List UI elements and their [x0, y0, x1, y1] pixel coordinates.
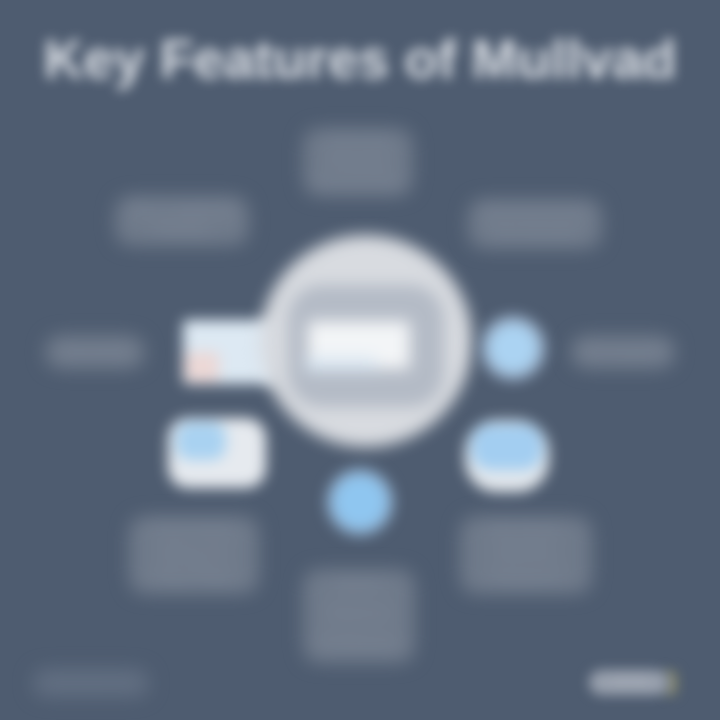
text block: bottom feature [303, 569, 415, 663]
logo wordmark: VPN [610, 672, 648, 692]
text block: middle left feature [45, 335, 145, 369]
text block: upper right feature [468, 199, 602, 249]
text block: top feature: Strong [329, 129, 387, 149]
text block: upper left feature [115, 196, 249, 246]
text block: upper left feature: No Logging [129, 197, 235, 218]
outer ring [260, 235, 472, 447]
card blue area [176, 422, 226, 460]
title: Key Features of Mullvad [44, 28, 676, 90]
text block: lower right feature [460, 516, 592, 594]
circle halo [480, 315, 546, 381]
icon: bottom circle [318, 460, 402, 544]
footer text left: mullvad.net [47, 674, 135, 691]
card body [168, 418, 266, 488]
inner screen [308, 321, 410, 369]
footer logo right [584, 663, 682, 702]
footer text left [32, 668, 150, 698]
circle halo [326, 468, 394, 536]
text block: middle right feature: Encrypted [579, 342, 667, 362]
text block: upper right feature: Anonymous [480, 200, 590, 221]
text block: bottom feature: Software [319, 633, 399, 654]
text block: top feature: Privacy [326, 152, 390, 172]
text block: lower left feature [129, 516, 259, 594]
text block: upper left feature: Policy [154, 221, 210, 242]
text block: lower right feature: Support [490, 568, 562, 589]
card body [465, 420, 549, 492]
text block: lower left feature: Flat Rate [154, 518, 234, 539]
text block: bottom feature: Source [327, 603, 391, 624]
central magnifier graphic [252, 224, 482, 458]
inner window [288, 285, 444, 407]
screen blue tint [306, 357, 376, 371]
card blue area [471, 424, 543, 470]
text block: lower right feature: Device [495, 543, 557, 564]
icon: lower right card [455, 410, 559, 502]
text block: lower left feature: Pay Plan [154, 568, 234, 589]
text block: bottom feature: Open [335, 573, 383, 594]
text block: top feature [303, 128, 413, 196]
icon: lower left card [158, 408, 276, 498]
card body [183, 320, 281, 384]
text block: middle right feature [571, 335, 675, 369]
icon: right circle [474, 307, 554, 389]
circle fill [333, 475, 387, 529]
card orange accent [185, 352, 219, 382]
icon: left browser card [172, 310, 278, 394]
text block: top feature: Protection [313, 175, 402, 195]
text block: lower right feature: Multiple [490, 518, 562, 539]
circle fill [488, 323, 538, 373]
text block: lower left feature: Easy to [160, 543, 228, 564]
text block: middle left feature: Security [59, 342, 131, 362]
logo accent [665, 670, 677, 696]
logo wordmark [589, 670, 669, 695]
text block: upper right feature: Accounts [492, 224, 578, 245]
